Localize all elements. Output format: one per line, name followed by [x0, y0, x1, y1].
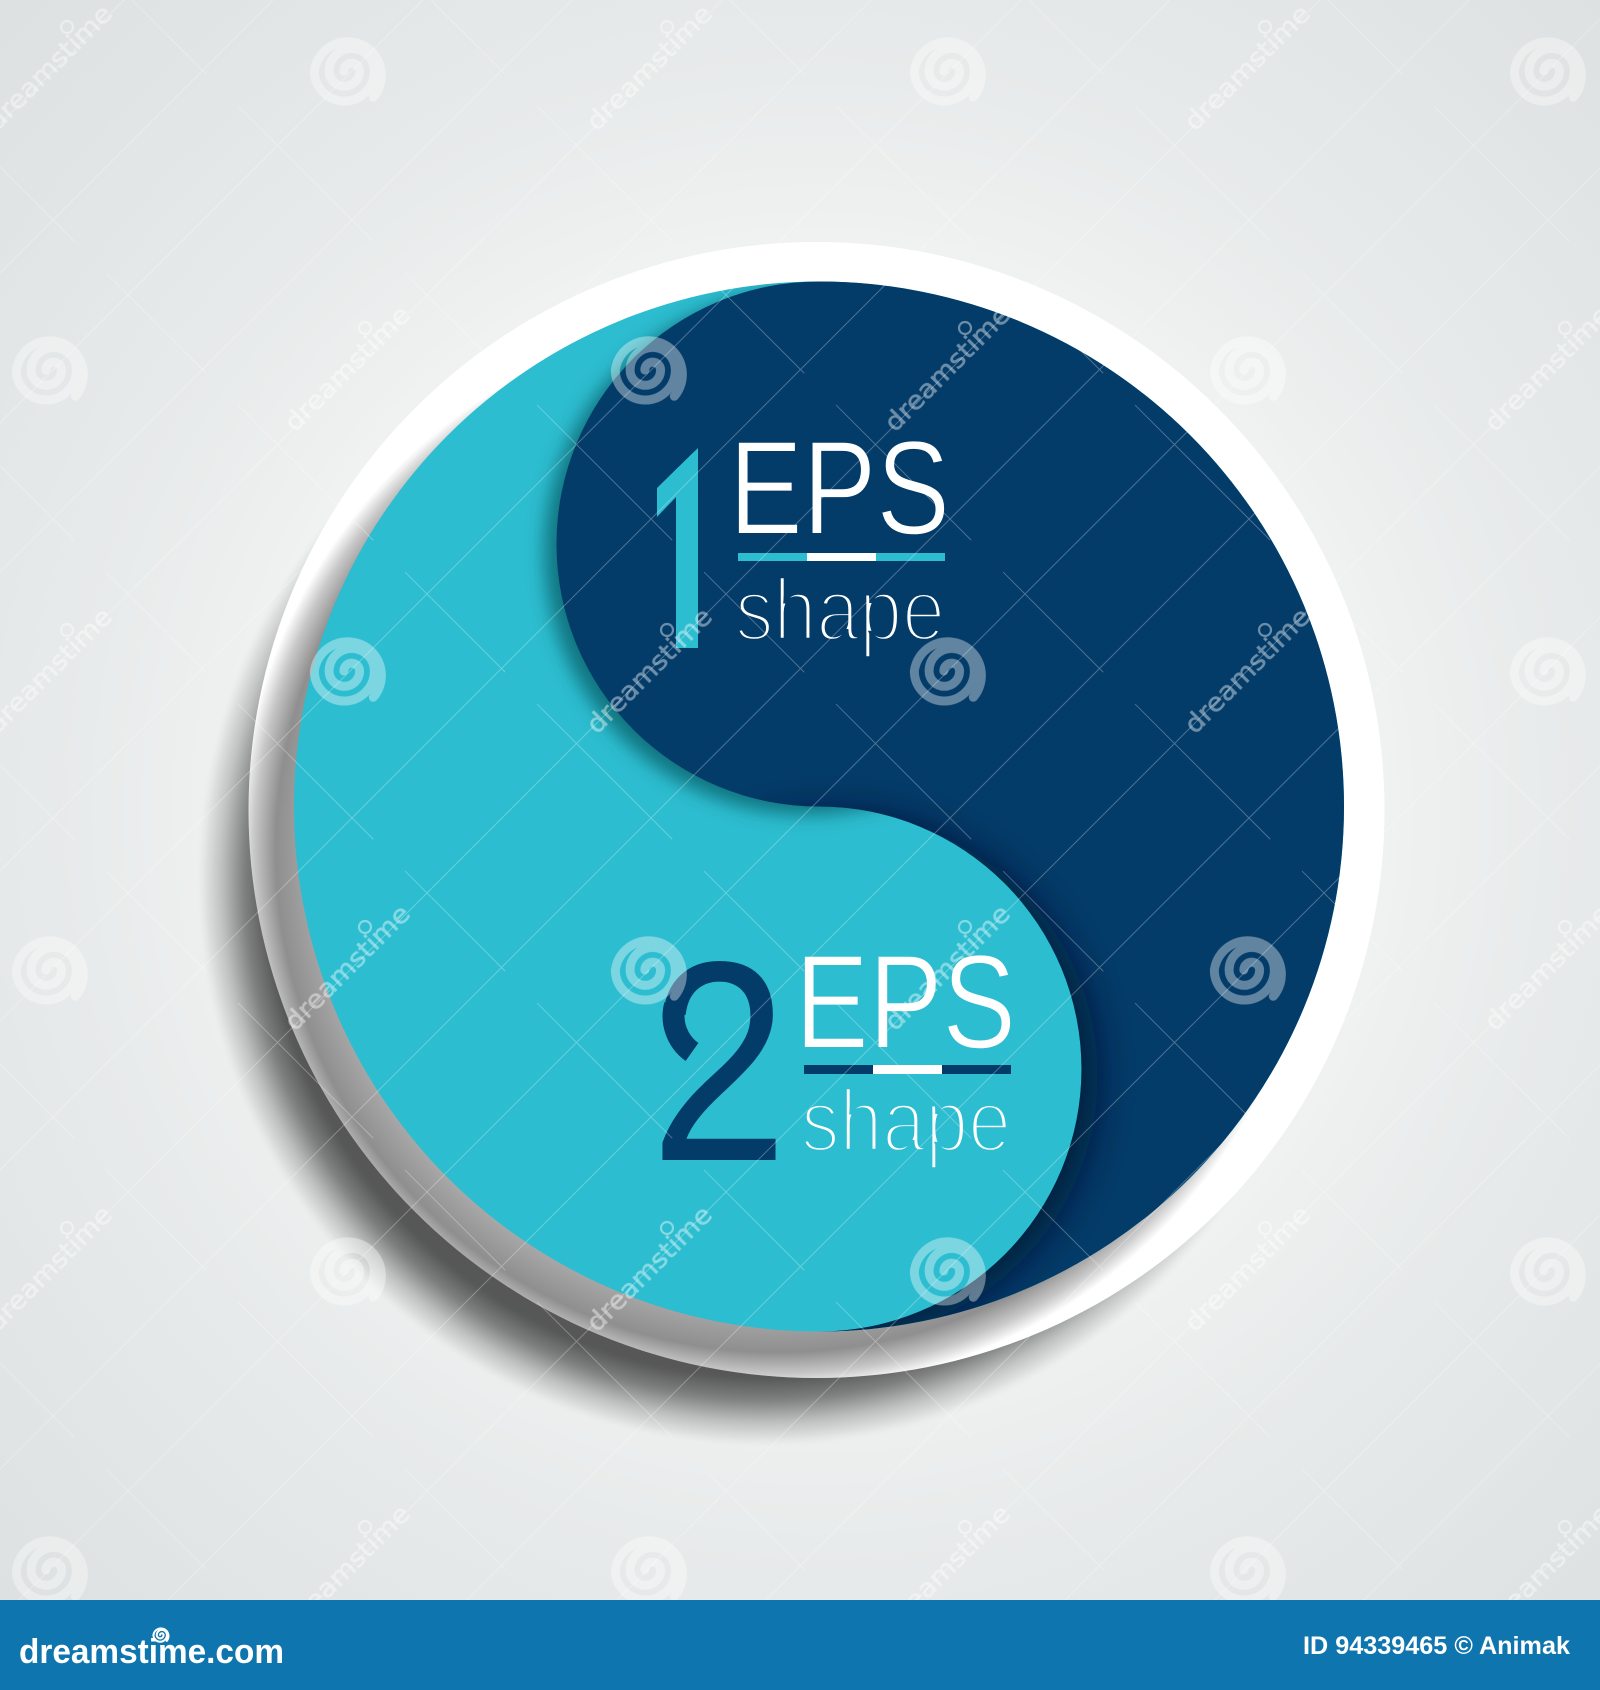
segment 2: teal base shape: [294, 282, 1344, 1332]
footer image id and credit: ID 94339465 © Animak: [1303, 1632, 1570, 1660]
white outer ring: [248, 242, 1384, 1378]
numeral 1: 1: [598, 391, 757, 709]
outer drop shadow of the ring: [199, 315, 1329, 1445]
segment 1: dark navy shape: [556, 282, 1344, 1332]
footer logo text: dreamstime.com: [19, 1633, 284, 1671]
watermark dreamstime text: dreamstime: [879, 899, 1017, 1037]
watermark dreamstime text: dreamstime: [279, 300, 417, 438]
footer logo spiral icon: [153, 1628, 169, 1642]
heading EPS 1: EPS: [729, 414, 950, 563]
heading EPS 2: EPS: [795, 928, 1016, 1077]
watermark dreamstime text: dreamstime: [879, 1499, 1017, 1637]
inner shadow cast on the ring: [248, 394, 1252, 1378]
subtitle shape 1: shape: [735, 560, 945, 659]
watermark dreamstime text: dreamstime: [581, 0, 719, 137]
watermark dreamstime text: dreamstime: [279, 899, 417, 1037]
block 2: number and label: [650, 903, 1016, 1221]
divider bar 1: [738, 553, 945, 561]
numeral 2 hook extension: [674, 1005, 692, 1052]
watermark dreamstime text: dreamstime: [1179, 0, 1317, 137]
yin-yang disc: [294, 282, 1344, 1338]
watermark dreamstime text: dreamstime: [1179, 602, 1317, 740]
shadow of the dark lobe on teal: [534, 282, 883, 826]
subtitle shape 2: shape: [801, 1071, 1011, 1170]
watermark dreamstime text: dreamstime: [1179, 1200, 1317, 1338]
footer bar: [0, 1600, 1600, 1690]
divider bar 2: [804, 1065, 1011, 1074]
watermark dreamstime text: dreamstime: [581, 602, 719, 740]
shadow of the teal lobe on navy: [768, 793, 1118, 1332]
watermark dreamstime text: dreamstime: [581, 1200, 719, 1338]
watermark dreamstime text: dreamstime: [879, 300, 1017, 438]
block 1: number and label: [657, 441, 945, 656]
numeral 2: 2: [650, 903, 788, 1221]
watermark dreamstime text: dreamstime: [279, 1499, 417, 1637]
